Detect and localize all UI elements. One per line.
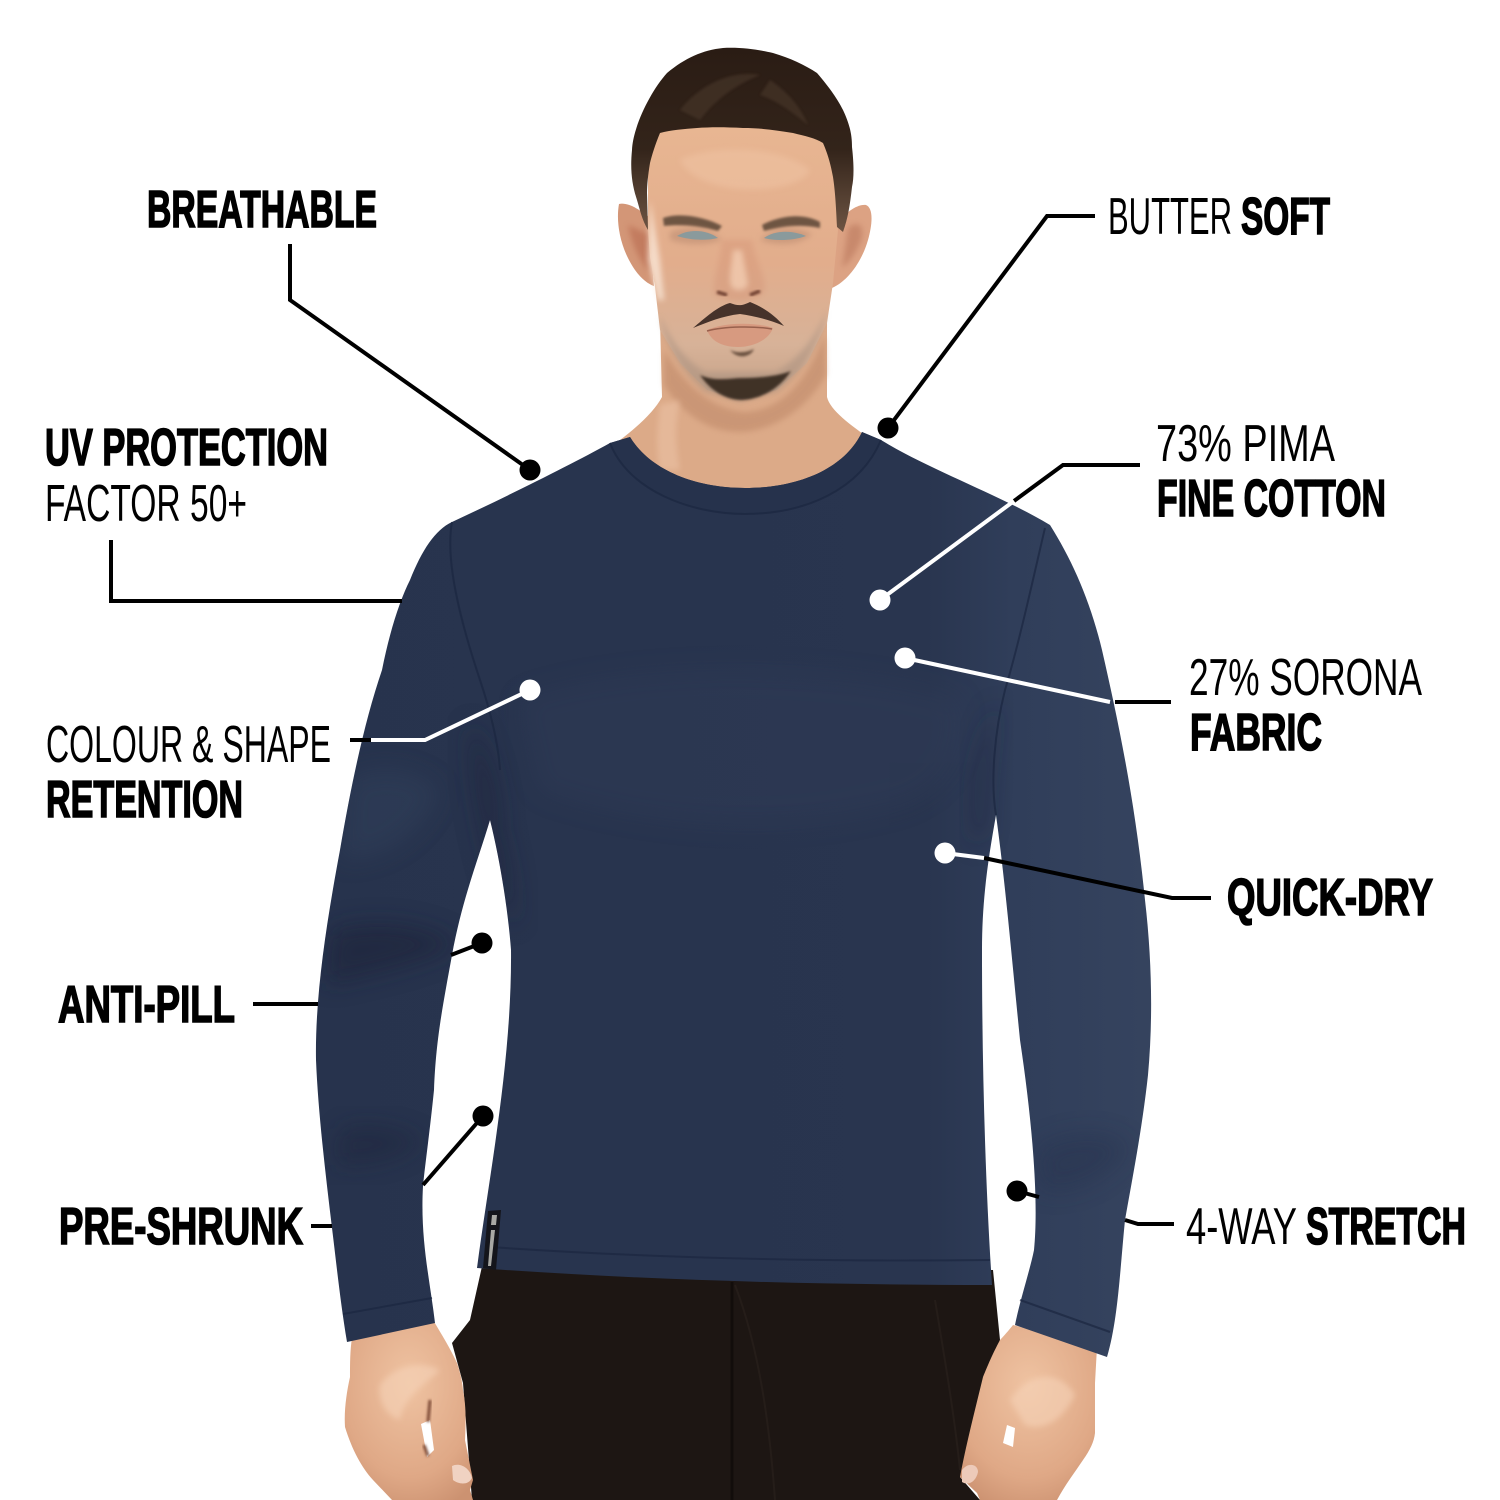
callout: quick-dry [934, 842, 1433, 927]
leader line outer [1125, 1220, 1174, 1224]
leader line black [1014, 465, 1140, 501]
trouser pocket seam [735, 1285, 960, 1500]
label bold: RETENTION [46, 771, 243, 829]
callout: uv protection [45, 419, 402, 601]
armpit shadow right [973, 700, 1000, 850]
right hand [960, 1325, 1097, 1500]
ear right [832, 205, 872, 288]
label tag marking [488, 1215, 497, 1266]
armpit shadow left [480, 820, 506, 906]
left hand knuckle shading [380, 1365, 440, 1420]
label light: 4-WAY [1186, 1198, 1297, 1256]
leader line black [984, 858, 1211, 898]
callout: sorona fabric [894, 648, 1422, 762]
neck shadow under jaw [664, 335, 826, 432]
ear right shadow [842, 224, 862, 268]
leader line [290, 244, 530, 470]
marker dot [1006, 1180, 1028, 1202]
forehead highlight [680, 150, 810, 189]
nostrils [717, 291, 760, 295]
jaw stubble [660, 310, 827, 402]
marker dot [520, 680, 540, 700]
soul patch [730, 349, 754, 356]
left cuff seam [343, 1298, 432, 1314]
collar seam [610, 440, 881, 514]
leader line outer [253, 1002, 318, 1006]
hem seam [490, 1247, 990, 1260]
marker dot [472, 1106, 494, 1126]
chest shading [520, 670, 962, 825]
right hand knuckle shading [1010, 1377, 1075, 1427]
leader line [111, 540, 402, 601]
nose shadow [714, 240, 765, 301]
leader line inner [423, 1116, 483, 1185]
face left rim highlight [648, 200, 664, 300]
callout: butter soft [878, 188, 1330, 438]
collar ribbing [610, 432, 881, 514]
hair texture [680, 74, 808, 125]
leader line [888, 216, 1095, 428]
marker dot [934, 842, 956, 864]
label light: 73% PIMA [1156, 415, 1335, 473]
callout: colour and shape retention [46, 680, 540, 829]
trousers [452, 1262, 1000, 1500]
shirt body and sleeves [300, 420, 1170, 1370]
hair [631, 48, 854, 232]
right sleeve fold [1033, 1153, 1096, 1171]
label light: FACTOR 50+ [45, 475, 247, 533]
ear left [618, 204, 654, 286]
left eyebrow [663, 215, 722, 231]
callout: breathable [147, 181, 540, 480]
marker dot [870, 590, 890, 610]
left hand [345, 1320, 473, 1500]
moustache [693, 302, 784, 328]
right eyebrow [762, 216, 820, 231]
face [648, 125, 838, 400]
right thumb nail [962, 1465, 978, 1484]
label light: COLOUR & SHAPE [46, 716, 331, 774]
shirt label tag [483, 1210, 501, 1270]
neck [620, 320, 880, 505]
leader line inner [1017, 1191, 1039, 1197]
label bold: FINE COTTON [1157, 470, 1386, 528]
left forearm fold [356, 1139, 381, 1150]
marker dot [894, 648, 916, 668]
left eye [677, 231, 718, 240]
leader line white [905, 658, 1110, 702]
left hand gap [421, 1420, 434, 1457]
left finger crease [424, 1400, 430, 1456]
callout: pre-shrunk [59, 1106, 494, 1256]
neck tendon highlight [657, 400, 680, 470]
right hand gap [1003, 1425, 1015, 1447]
lips [707, 324, 773, 347]
leader line white [880, 501, 1014, 600]
label light: BUTTER [1108, 188, 1232, 246]
label bold: FABRIC [1190, 704, 1322, 762]
leader line white [371, 690, 530, 740]
leader line outer [311, 1224, 332, 1228]
leader line inner [451, 943, 482, 955]
marker dot [520, 460, 540, 480]
label: BREATHABLE [147, 181, 377, 239]
leader line white [945, 853, 984, 858]
label: PRE-SHRUNK [59, 1198, 303, 1256]
right eye [764, 232, 806, 240]
ear left shadow [628, 225, 650, 272]
leader line black [1115, 700, 1171, 704]
left sleeve seam [450, 522, 500, 770]
marker dot [472, 932, 492, 954]
callout: 4-way stretch [1006, 1180, 1466, 1256]
right sleeve seam [993, 528, 1045, 815]
left eye socket [670, 228, 722, 244]
beard [700, 371, 791, 400]
shirt fill [300, 420, 1170, 1370]
left thumb nail [452, 1465, 472, 1484]
left sleeve elbow highlight [341, 777, 354, 843]
right cuff seam [1020, 1300, 1110, 1332]
callout: anti-pill [58, 932, 492, 1034]
label: ANTI-PILL [58, 976, 235, 1034]
left sleeve fold shadow [320, 924, 454, 978]
label bold: UV PROTECTION [45, 419, 328, 477]
leader line black [350, 738, 371, 742]
label bold: SOFT [1241, 188, 1330, 246]
trouser centre seam [730, 1282, 734, 1500]
marker dot [878, 418, 898, 438]
man wearing navy shirt [300, 48, 1170, 1500]
callout: pima cotton [870, 415, 1386, 610]
right eye socket [760, 229, 812, 244]
mouth line [707, 327, 772, 331]
nose highlight [730, 250, 748, 290]
